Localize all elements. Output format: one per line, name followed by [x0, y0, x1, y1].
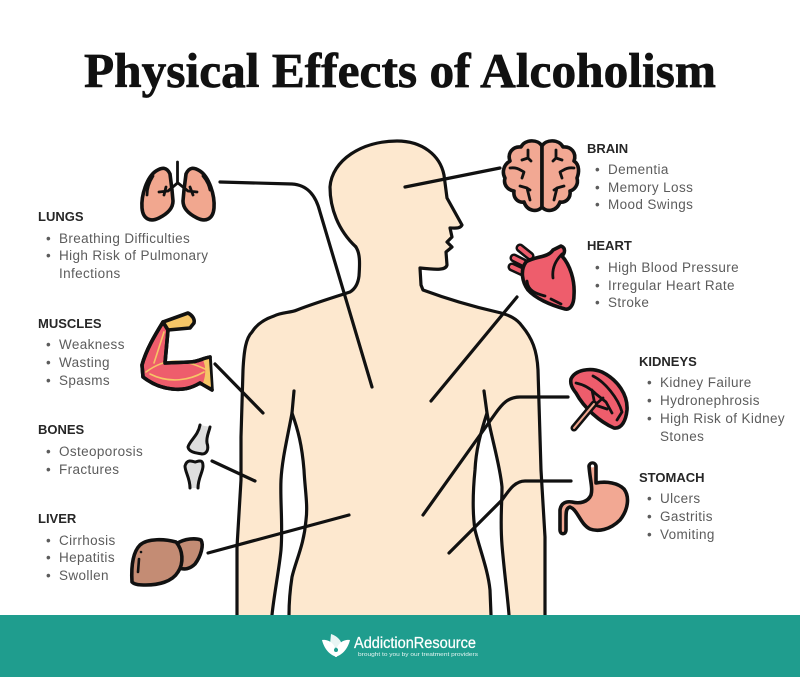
label: bones: •	[46, 444, 51, 459]
label: brain	[587, 141, 693, 212]
pointer: muscles	[215, 364, 263, 413]
label: heart: Stroke	[608, 295, 649, 310]
label: bones	[38, 422, 143, 477]
icon: lungs	[142, 162, 214, 220]
label: lungs: •	[46, 248, 51, 263]
title: Physical Effects of Alcoholism	[84, 43, 716, 98]
label: liver: •	[46, 568, 51, 583]
pointer: kidneys	[423, 397, 568, 515]
label: lungs: Breathing Difficulties	[59, 231, 190, 246]
label: lungs	[38, 209, 208, 281]
icon: footer logo	[322, 634, 350, 657]
body silhouette	[237, 141, 545, 615]
label: stomach: Vomiting	[660, 527, 715, 542]
label: lungs: High Risk of Pulmonary	[59, 248, 208, 263]
label: kidneys: High Risk of Kidney	[660, 411, 785, 426]
label: stomach: •	[647, 527, 652, 542]
icon: kidney	[571, 370, 627, 428]
label: liver: Swollen	[59, 568, 109, 583]
icon: brain	[503, 141, 579, 210]
label: kidneys: •	[647, 393, 652, 408]
label: liver: •	[46, 550, 51, 565]
label: liver: Cirrhosis	[59, 533, 116, 548]
label: bones: Fractures	[59, 462, 119, 477]
label: muscles: •	[46, 337, 51, 352]
label: heart: •	[595, 278, 600, 293]
label: lungs: •	[46, 231, 51, 246]
label: muscles: Spasms	[59, 373, 110, 388]
label: heart: •	[595, 295, 600, 310]
label: liver: •	[46, 533, 51, 548]
label: brain: •	[595, 162, 600, 177]
label: brain: Memory Loss	[608, 180, 693, 195]
label: heart: High Blood Pressure	[608, 260, 739, 275]
label: kidneys: •	[647, 375, 652, 390]
footer band	[0, 615, 800, 677]
label: kidneys: •	[647, 411, 652, 426]
icon: liver	[132, 539, 202, 585]
label: heart	[587, 238, 739, 310]
label: heart: •	[595, 260, 600, 275]
icon: flexed arm muscle	[142, 313, 212, 390]
label: lungs: Infections	[59, 266, 121, 281]
label: muscles: •	[46, 355, 51, 370]
label: stomach	[639, 470, 715, 542]
footer tagline: brought to you by our treatment providers	[358, 652, 478, 658]
pointer: brain	[405, 168, 500, 187]
label: liver: Hepatitis	[59, 550, 115, 565]
label: kidneys: Kidney Failure	[660, 375, 752, 390]
label: muscles	[38, 316, 125, 388]
label: kidneys: KIDNEYS	[639, 354, 697, 369]
label: kidneys: Stones	[660, 429, 704, 444]
pointer: stomach	[449, 481, 571, 553]
label: brain: Dementia	[608, 162, 669, 177]
pointer: liver	[208, 515, 349, 553]
label: kidneys	[639, 354, 785, 444]
label: brain: Mood Swings	[608, 197, 693, 212]
label: stomach: •	[647, 509, 652, 524]
pointer: lungs	[220, 182, 372, 387]
pointer: heart	[431, 297, 517, 401]
label: brain: BRAIN	[587, 141, 628, 156]
label: stomach: STOMACH	[639, 470, 704, 485]
label: muscles: Wasting	[59, 355, 110, 370]
label: brain: •	[595, 180, 600, 195]
label: heart: HEART	[587, 238, 632, 253]
icon: heart	[512, 246, 574, 309]
label: bones: •	[46, 462, 51, 477]
label: muscles: •	[46, 373, 51, 388]
label: lungs: LUNGS	[38, 209, 84, 224]
footer brand name: AddictionResource	[354, 635, 476, 652]
label: liver	[38, 511, 116, 583]
label: muscles: MUSCLES	[38, 316, 102, 331]
icon: knee bones	[185, 425, 210, 488]
label: stomach: Ulcers	[660, 491, 701, 506]
label: bones: BONES	[38, 422, 85, 437]
label: liver: LIVER	[38, 511, 77, 526]
label: kidneys: Hydronephrosis	[660, 393, 760, 408]
label: bones: Osteoporosis	[59, 444, 143, 459]
label: stomach: •	[647, 491, 652, 506]
pointer: bones	[212, 461, 255, 481]
label: stomach: Gastritis	[660, 509, 713, 524]
label: heart: Irregular Heart Rate	[608, 278, 735, 293]
icon: stomach	[560, 463, 627, 534]
label: brain: •	[595, 197, 600, 212]
label: muscles: Weakness	[59, 337, 125, 352]
